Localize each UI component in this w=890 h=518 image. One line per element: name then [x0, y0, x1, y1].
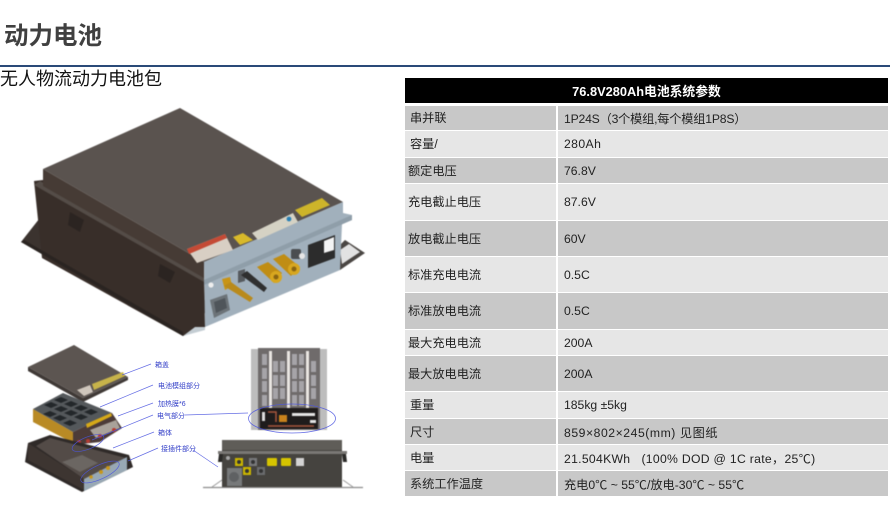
callout labels: 加热膜*6: [158, 399, 186, 408]
callout labels: 电气部分: [157, 411, 185, 420]
electrical part: [73, 413, 122, 445]
connectors: [208, 249, 305, 318]
subtitle: 无人物流动力电池包: [0, 69, 162, 89]
table rows: 标准充电电流: [408, 268, 481, 282]
housing: [25, 435, 133, 492]
table rows: 重量: [410, 398, 434, 412]
callout leader lines: [70, 364, 248, 487]
table rows: 串并联: [410, 111, 447, 125]
callout labels: 接插件部分: [161, 444, 196, 453]
table rows: 185kg ±5kg: [564, 398, 627, 412]
table rows: 充电0℃ ~ 55℃/放电-30℃ ~ 55℃: [564, 478, 744, 492]
table rows: 电量: [410, 450, 434, 464]
callout labels: 电池模组部分: [158, 381, 200, 390]
table rows: 标准放电电流: [408, 304, 481, 318]
table rows: 容量/: [410, 137, 438, 151]
warning labels: [187, 198, 330, 263]
table rows: 额定电压: [408, 164, 457, 178]
callout labels: 箱盖: [155, 360, 169, 369]
table rows: 系统工作温度: [410, 476, 483, 490]
lid: [28, 367, 128, 402]
table rows: 859×802×245(mm) 见图纸: [564, 426, 718, 440]
header rule: [0, 65, 890, 67]
main battery pack image: [21, 108, 365, 336]
table rows: 280Ah: [564, 137, 601, 151]
nameplate: [308, 235, 335, 268]
title: 动力电池: [4, 23, 102, 50]
side view of connector panel: [203, 440, 363, 488]
callout labels: 箱体: [158, 428, 172, 437]
table rows: 尺寸: [410, 424, 434, 438]
callout labels: [155, 360, 200, 453]
top view of internals: [251, 348, 327, 430]
exploded view image: [25, 345, 133, 492]
table rows: 87.6V: [564, 195, 596, 209]
table rows: 1P24S（3个模组,每个模组1P8S）: [564, 112, 746, 126]
table rows: 充电截止电压: [408, 195, 481, 209]
table rows: 0.5C: [564, 304, 590, 318]
table rows: 200A: [564, 336, 592, 350]
table header: [405, 78, 888, 103]
electrical area callout ellipse: [248, 404, 336, 433]
table rows: 最大放电电流: [408, 366, 481, 380]
table rows: 放电截止电压: [408, 232, 481, 246]
table rows: 60V: [564, 232, 586, 246]
table rows: 200A: [564, 366, 592, 380]
table rows: 最大充电电流: [408, 336, 481, 350]
cell modules: [33, 409, 73, 443]
table header: 76.8V280Ah电池系统参数: [572, 84, 721, 99]
table rows: 76.8V: [564, 164, 596, 178]
table rows: 21.504KWh (100% DOD @ 1C rate，25℃): [564, 452, 815, 466]
table rows: 0.5C: [564, 268, 590, 282]
